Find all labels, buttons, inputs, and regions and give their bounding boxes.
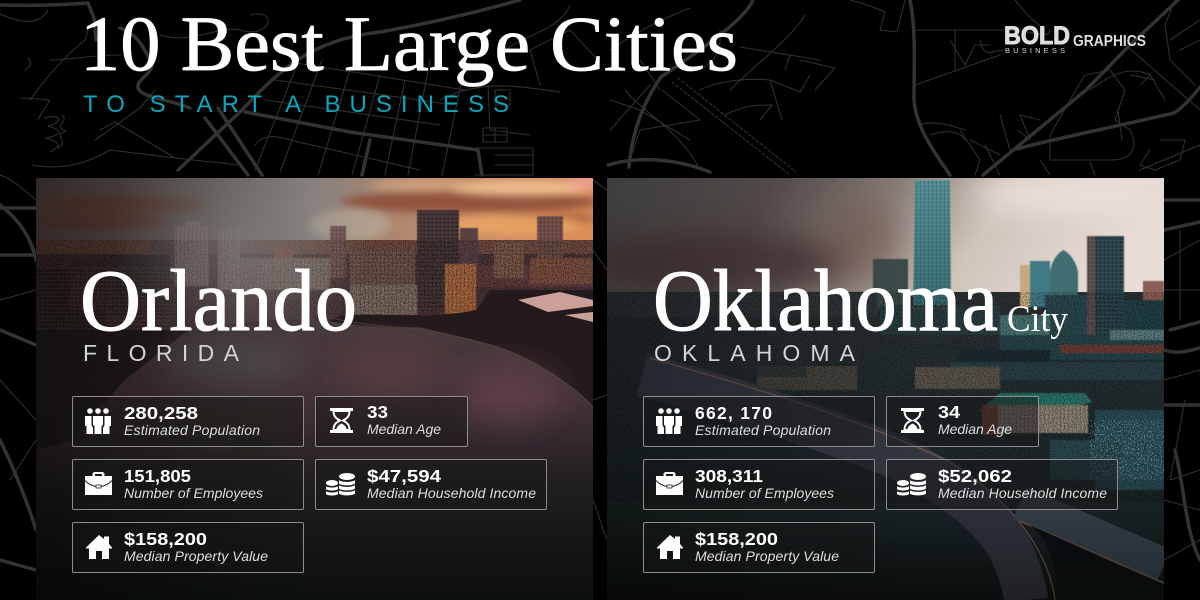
- stat: median age: 34: [938, 402, 960, 422]
- stat: population: Estimated Population: [695, 422, 831, 438]
- stat: population: 662, 170: [695, 403, 772, 423]
- stat: population: 280,258: [124, 403, 198, 423]
- logo: Bold Business Graphics: BOLD: [1004, 22, 1070, 50]
- logo: Bold Business Graphics: [1004, 22, 1146, 55]
- subtitle: TO START A BUSINESS: [83, 91, 509, 118]
- panel: Oklahoma City: [590, 177, 1164, 600]
- stat: population: [644, 396, 874, 446]
- stat: population: Estimated Population: [124, 422, 260, 438]
- icon: hourglass: [330, 408, 353, 433]
- stat: income: Median Household Income: [938, 485, 1107, 501]
- stat: property value: Median Property Value: [695, 548, 839, 564]
- stat: median age: [886, 396, 1038, 446]
- stat: property value: [72, 522, 304, 572]
- icon: house: [86, 535, 112, 559]
- stat: employees: Number of Employees: [124, 485, 263, 501]
- stat: median age: [316, 396, 468, 446]
- stat: income: Median Household Income: [367, 485, 536, 501]
- left dark land: [36, 330, 189, 450]
- overpass road: [642, 358, 1164, 600]
- icon: hourglass: [901, 408, 924, 433]
- icon: people: [656, 408, 682, 434]
- stat: employees: [72, 460, 304, 510]
- stat: income: $52,062: [938, 466, 1012, 486]
- logo: Bold Business Graphics: BUSINESS: [1005, 46, 1065, 55]
- stat: employees: [644, 460, 874, 510]
- stat: property value: Median Property Value: [124, 548, 268, 564]
- stat: income: [316, 460, 546, 510]
- stat: property value: $158,200: [695, 529, 778, 549]
- stat: median age: Median Age: [938, 421, 1012, 437]
- stat: median age: Median Age: [367, 421, 441, 437]
- stat: property value: [644, 522, 874, 572]
- icon: coins: [326, 473, 355, 496]
- city name suffix: City: City: [1007, 299, 1068, 340]
- photo: Oklahoma City skyline: [590, 177, 1164, 600]
- icon: people: [85, 408, 111, 434]
- state name: Oklahoma: OKLAHOMA: [654, 340, 856, 366]
- state name: Florida: FLORIDA: [83, 340, 240, 366]
- stat: employees: 308,311: [695, 466, 763, 486]
- skyline land: [36, 254, 593, 332]
- stat: population: [72, 396, 304, 446]
- city name: Orlando: Orlando: [80, 253, 357, 350]
- icon: house: [657, 535, 683, 559]
- stat: employees: Number of Employees: [695, 485, 834, 501]
- lake: [36, 320, 593, 600]
- panel: Orlando: [36, 178, 593, 600]
- stat: income: [886, 460, 1118, 510]
- photo: Orlando skyline at sunset: [36, 178, 593, 600]
- icon: briefcase: [656, 472, 683, 495]
- stat: property value: $158,200: [124, 529, 207, 549]
- stat: median age: 33: [367, 402, 388, 422]
- icon: briefcase: [85, 472, 112, 495]
- logo: Bold Business Graphics: GRAPHICS: [1073, 33, 1146, 50]
- dark shore: [320, 290, 593, 410]
- icon: coins: [897, 473, 926, 496]
- title: 10 Best Large Cities: [80, 0, 738, 87]
- city name: Oklahoma: Oklahoma: [653, 253, 998, 350]
- stat: income: $47,594: [367, 466, 441, 486]
- stat: employees: 151,805: [124, 466, 191, 486]
